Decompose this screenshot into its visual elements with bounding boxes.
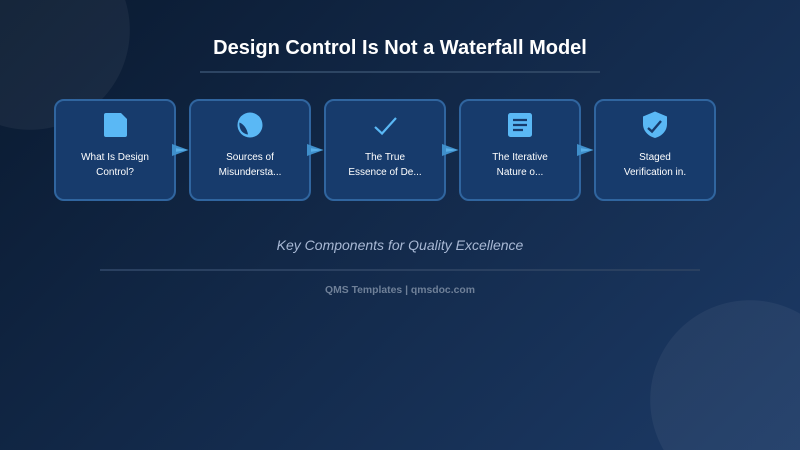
card label — [348, 152, 422, 178]
card label: Control? — [96, 167, 134, 178]
footer text: QMS Templates | qmsdoc.com — [325, 285, 475, 296]
panel: sources of misunderstanding — [189, 99, 311, 201]
icon: text document — [508, 113, 532, 137]
card label: Sources of — [226, 152, 274, 163]
card label: What Is Design — [81, 152, 149, 163]
icon: circle with leaf — [238, 112, 262, 138]
icon: shield with check — [643, 112, 667, 138]
card label: Verification in. — [624, 167, 686, 178]
arrow 2 — [307, 144, 324, 156]
card label — [81, 152, 149, 178]
arrow 3 — [442, 144, 458, 156]
panel: true essence — [324, 99, 446, 201]
arrow 1 — [172, 144, 188, 156]
icon: document — [104, 113, 127, 137]
decorative circle: top left — [0, 0, 130, 130]
panel: what is design control — [54, 99, 176, 201]
card label: The True — [365, 152, 405, 163]
card label — [219, 152, 281, 178]
panel: iterative nature — [459, 99, 581, 201]
footer divider — [100, 269, 700, 271]
icon: check mark — [374, 117, 397, 135]
card label: Essence of De... — [348, 167, 422, 178]
panel: staged verification — [594, 99, 716, 201]
title underline — [200, 71, 600, 73]
card label: Staged — [639, 152, 671, 163]
arrow 4 — [577, 144, 594, 156]
card label: Misundersta... — [219, 167, 281, 178]
subtitle: Key Components for Quality Excellence — [277, 237, 523, 253]
title: Design Control Is Not a Waterfall Model — [213, 37, 587, 59]
card label: Nature o... — [497, 167, 543, 178]
card label — [492, 152, 548, 178]
card label — [624, 152, 686, 178]
decorative circle: bottom right — [650, 300, 800, 450]
card label: The Iterative — [492, 152, 548, 163]
